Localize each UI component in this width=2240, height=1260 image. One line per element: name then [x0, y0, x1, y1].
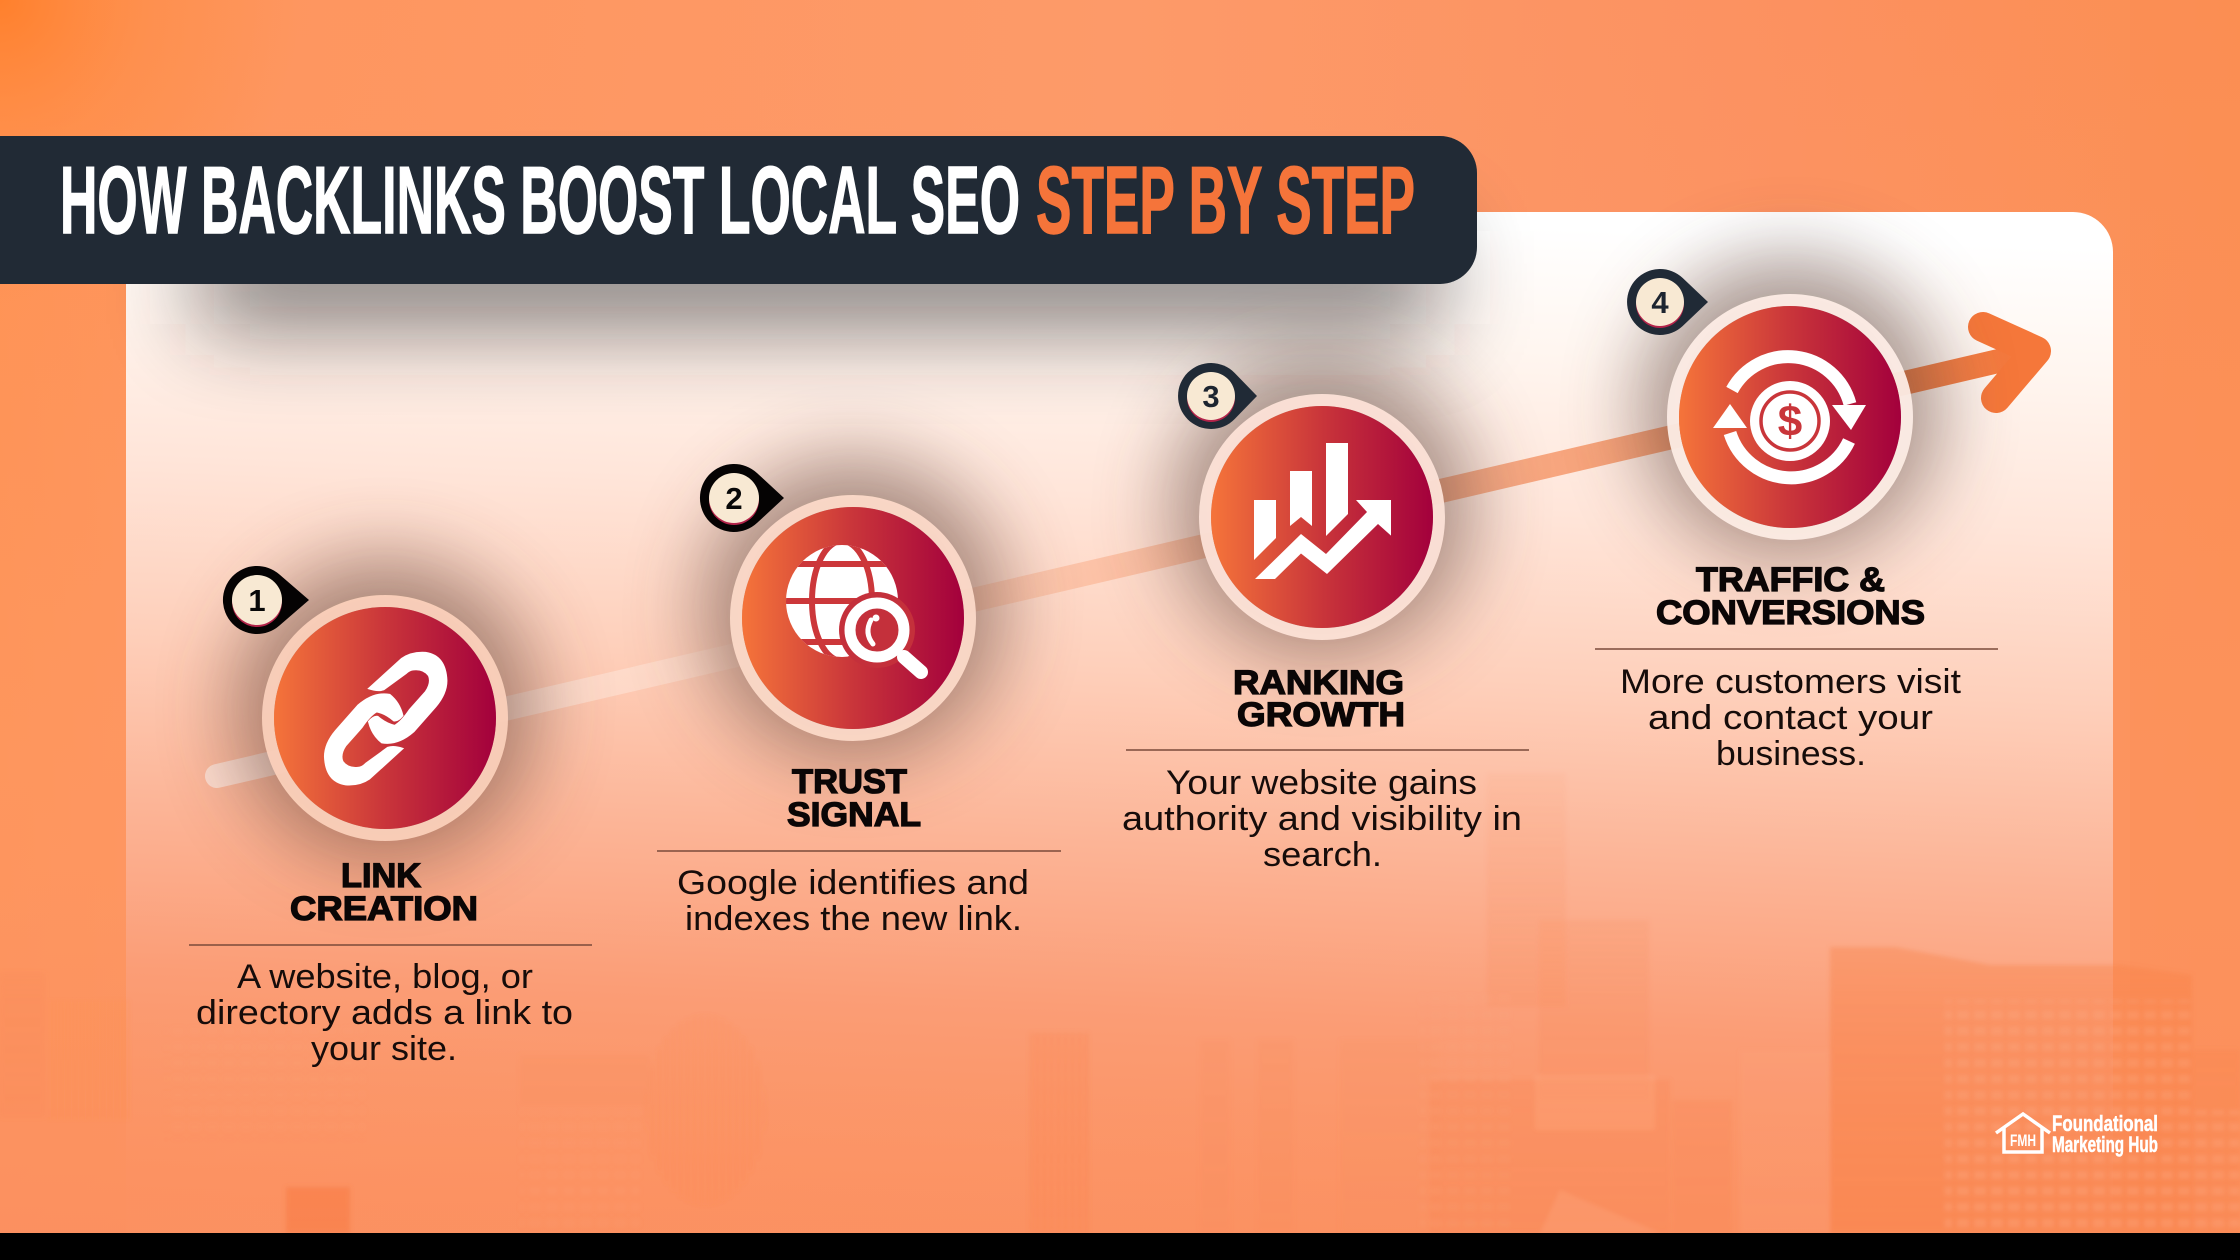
growth arrow	[217, 327, 2036, 776]
step 1 description: A website, blog, or	[237, 958, 533, 996]
title: STEP BY STEP	[1036, 147, 1415, 254]
icon: chain link	[325, 652, 447, 785]
step 4 description: More customers visit	[1620, 663, 1962, 701]
step 1 description	[196, 958, 573, 1068]
step 1 heading: CREATION	[290, 890, 478, 928]
logo: Foundational Marketing Hub	[1996, 1111, 2158, 1157]
step 3 badge: 3	[1202, 379, 1220, 414]
step 1 disc	[268, 601, 502, 835]
logo wordmark: Foundational	[2052, 1111, 2158, 1136]
icon: house	[1996, 1114, 2050, 1152]
step 4 badge: 4	[1651, 285, 1669, 320]
step 2 heading	[787, 763, 921, 834]
step 4 description: and contact your	[1648, 699, 1933, 737]
panel: white gradient card	[126, 212, 2113, 1233]
step 2: trust signal	[657, 464, 1061, 938]
title: HOW BACKLINKS BOOST LOCAL SEO	[60, 147, 1020, 254]
step 2 description	[677, 864, 1029, 938]
step 4 heading: CONVERSIONS	[1656, 594, 1925, 632]
step 1: link creation	[189, 566, 592, 1068]
step 1 description: directory adds a link to	[196, 994, 573, 1032]
step 3: ranking growth	[1122, 363, 1529, 874]
step 2 disc	[736, 501, 970, 735]
step 3 heading: RANKING	[1233, 664, 1404, 702]
step 3 description: search.	[1263, 836, 1382, 874]
step 3 description: Your website gains	[1166, 764, 1477, 802]
step 4 badge	[1627, 269, 1708, 335]
circle shadows	[235, 257, 1940, 858]
step 4 disc	[1673, 300, 1907, 534]
step 4: traffic and conversions	[1595, 269, 1998, 773]
step 1 badge	[223, 566, 309, 634]
step 3 disc	[1205, 400, 1439, 634]
step 2 badge	[700, 464, 784, 532]
step 2 badge: 2	[725, 481, 743, 516]
icon: globe with magnifier	[780, 541, 921, 672]
logo wordmark	[2052, 1111, 2158, 1157]
title banner shadow	[200, 230, 1440, 325]
logo wordmark: Marketing Hub	[2052, 1132, 2158, 1157]
step 4 description	[1620, 663, 1962, 773]
step 2 description: Google identifies and	[677, 864, 1029, 902]
icon: rising bar chart	[1254, 443, 1391, 579]
step 1 description: your site.	[311, 1030, 457, 1068]
step 3 badge	[1178, 363, 1257, 429]
step 2 heading: TRUST	[792, 763, 907, 801]
icon: dollar coin with cycle arrows: $	[1778, 397, 1802, 446]
step 1 heading	[290, 857, 478, 928]
step 4 heading: TRAFFIC &	[1696, 561, 1885, 599]
bottom black bar	[0, 1233, 2240, 1260]
icon: house: FMH	[2010, 1131, 2036, 1150]
step 1 heading: LINK	[341, 857, 421, 895]
title banner	[0, 136, 1477, 284]
step 3 heading	[1233, 664, 1405, 734]
icon: dollar coin with cycle arrows	[1713, 357, 1866, 478]
step 2 heading: SIGNAL	[787, 796, 921, 834]
step 4 description: business.	[1716, 735, 1866, 773]
step 2 description: indexes the new link.	[685, 900, 1022, 938]
step 3 heading: GROWTH	[1237, 696, 1405, 734]
step 1 badge: 1	[248, 583, 266, 618]
step 3 description	[1122, 764, 1522, 874]
step 3 description: authority and visibility in	[1122, 800, 1522, 838]
step 4 heading	[1656, 561, 1925, 632]
background skyline	[286, 916, 2236, 1233]
